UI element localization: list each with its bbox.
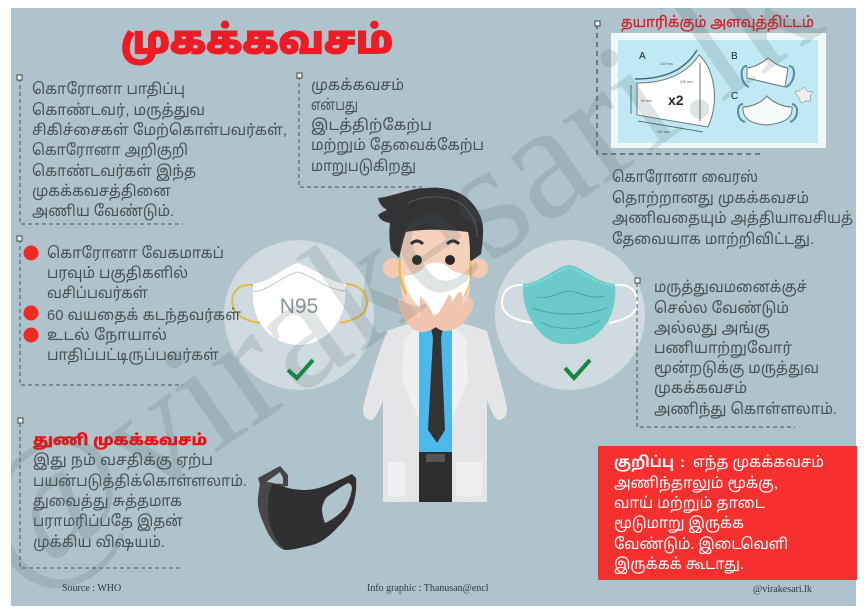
coat pockets	[388, 462, 482, 497]
callout: note: குறிப்பு	[614, 454, 674, 472]
pattern piece A	[637, 55, 714, 127]
ears	[383, 258, 403, 278]
text block: virus made masks essential: தேவையாக மாற்றிவிட்டது.	[612, 231, 814, 249]
text block: hospital visit: செல்ல வேண்டும்	[654, 300, 789, 318]
brows and eyes	[411, 241, 459, 244]
tie	[428, 324, 445, 443]
panel: high-risk groups	[17, 236, 241, 385]
text block: high-risk groups: வசிப்பவர்கள்	[47, 285, 148, 302]
bullet points	[24, 246, 38, 342]
callout: note: எந்த முகக்கவசம்	[693, 454, 824, 472]
text block: who should wear: அணிய வேண்டும்.	[32, 203, 174, 221]
panel: making plan	[595, 15, 826, 154]
heading: making plan: தயாரிக்கும் அளவுத்திட்டம்	[621, 15, 814, 32]
text block: virus made masks essential: கொரோனா வைரஸ்	[612, 169, 758, 186]
text block: hospital visit: மூன்றடுக்கு மருத்துவ	[654, 360, 819, 379]
text block: mask depends on place: முகக்கவசம்	[311, 77, 404, 95]
text block: cloth mask: பராமரிப்பதே இதன்	[33, 513, 183, 532]
text block: mask depends on place: மற்றும் தேவைக்கேற்ப	[311, 137, 484, 156]
diagram: mask pattern: 150 mm	[657, 130, 670, 134]
social handle: @virakesari.lk	[753, 584, 812, 595]
panel: hospital visit	[635, 278, 837, 427]
N95 mask circle	[224, 240, 374, 390]
callout: note: :	[680, 454, 685, 471]
text block: cloth mask: பயன்படுத்திக்கொள்ளலாம்.	[33, 473, 247, 491]
text block: who should wear: சிகிச்சைகள் மேற்கொள்பவர்கள்,	[32, 122, 287, 140]
trousers	[419, 452, 452, 502]
text block: mask depends on place: இடத்திற்கேற்ப	[311, 117, 432, 136]
text block: who should wear: முகக்கவசத்தினை	[32, 183, 171, 201]
text block: mask depends on place: என்பது	[311, 97, 358, 115]
diagram: mask pattern: B	[731, 51, 738, 62]
text block: hospital visit: பணியாற்றுவோர்	[654, 340, 792, 359]
panel: cloth mask	[18, 418, 247, 568]
text block: cloth mask: முக்கிய விஷயம்.	[33, 534, 165, 552]
icon: N95 mask	[232, 263, 367, 345]
hands	[398, 292, 473, 332]
callout: note: அணிந்தாலும் மூக்கு,	[614, 475, 778, 493]
text block: high-risk groups: 60 வயதைக் கடந்தவர்கள்	[47, 307, 241, 325]
icon: surgical mask	[502, 265, 637, 344]
panel: who should wear	[17, 75, 287, 224]
diagram: mask pattern: 130 mm	[660, 62, 673, 66]
title: முகக்கவசம்	[121, 20, 393, 65]
source credit: Source : WHO	[62, 583, 121, 594]
diagram: mask pattern: 120 mm	[680, 80, 693, 84]
text block: hospital visit: அல்லது அங்கு	[654, 320, 770, 338]
text block: hospital visit: முகக்கவசம்	[654, 380, 747, 398]
lapels	[402, 325, 468, 420]
callout: note	[598, 446, 857, 580]
text block: high-risk groups: உடல் நோயால்	[47, 327, 167, 345]
diagram: mask pattern: C	[731, 91, 738, 102]
text block: hospital visit: மருத்துவமனைக்குச்	[654, 279, 807, 298]
text block: who should wear: கொரோனா பாதிப்பு	[32, 81, 185, 99]
text block: mask depends on place: மாறுபடுகிறது	[311, 158, 416, 177]
text block: virus made masks essential: தொற்றானது முகக்கவசம்	[612, 190, 809, 208]
text block: cloth mask: துவைத்து சுத்தமாக	[33, 493, 182, 511]
text block: who should wear: கொண்டவர், மருத்துவ	[32, 102, 205, 121]
diagram: mask pattern: x2	[668, 92, 684, 108]
icon: check mark	[288, 360, 313, 378]
hair	[378, 188, 483, 262]
text block: cloth mask: இது நம் வசதிக்கு ஏற்ப	[33, 452, 213, 471]
callout: note: மூடுமாறு இருக்க	[614, 515, 744, 534]
mask C	[743, 96, 792, 125]
text block: virus made masks essential: அணிவதையும் அத்தியாவசியத்	[612, 210, 853, 228]
coat	[363, 320, 507, 502]
icon: check mark	[565, 360, 590, 378]
callout: note: வேண்டும். இடைவெளி	[614, 536, 788, 555]
text block: high-risk groups: பாதிப்பட்டிருப்பவர்கள்	[47, 347, 219, 366]
heading: cloth mask: துணி முகக்கவசம்	[33, 432, 207, 450]
diagram: mask pattern: A	[639, 51, 646, 62]
mask B	[747, 58, 788, 87]
shirt	[419, 323, 452, 452]
text block: high-risk groups: கொரோனா வேகமாகப்	[47, 245, 224, 262]
surgical mask circle	[495, 240, 645, 390]
text block: hospital visit: அணிந்து கொள்ளலாம்.	[654, 401, 837, 419]
illustration: doctor	[363, 188, 507, 502]
graphic credit: Info graphic : Thanusan@encl	[367, 583, 489, 594]
callout: note: வாய் மற்றும் தாடை	[614, 495, 766, 514]
text block: high-risk groups: பரவும் பகுதிகளில்	[47, 265, 188, 283]
panel: mask depends on place	[297, 73, 484, 187]
diagram: mask pattern	[611, 33, 826, 148]
text block: who should wear: கொரோனா அறிகுறி	[32, 142, 188, 160]
face	[401, 226, 470, 322]
mask straps	[399, 260, 471, 295]
icon: black cloth mask	[258, 466, 356, 550]
text block: who should wear: கொண்டவர்கள் இந்த	[32, 163, 196, 182]
diagram: mask pattern: 50 mm	[641, 99, 652, 103]
icon: N95 mask: N95	[280, 295, 318, 318]
N95 on face	[404, 262, 470, 314]
callout: note: இருக்கக் கூடாது.	[614, 556, 744, 575]
